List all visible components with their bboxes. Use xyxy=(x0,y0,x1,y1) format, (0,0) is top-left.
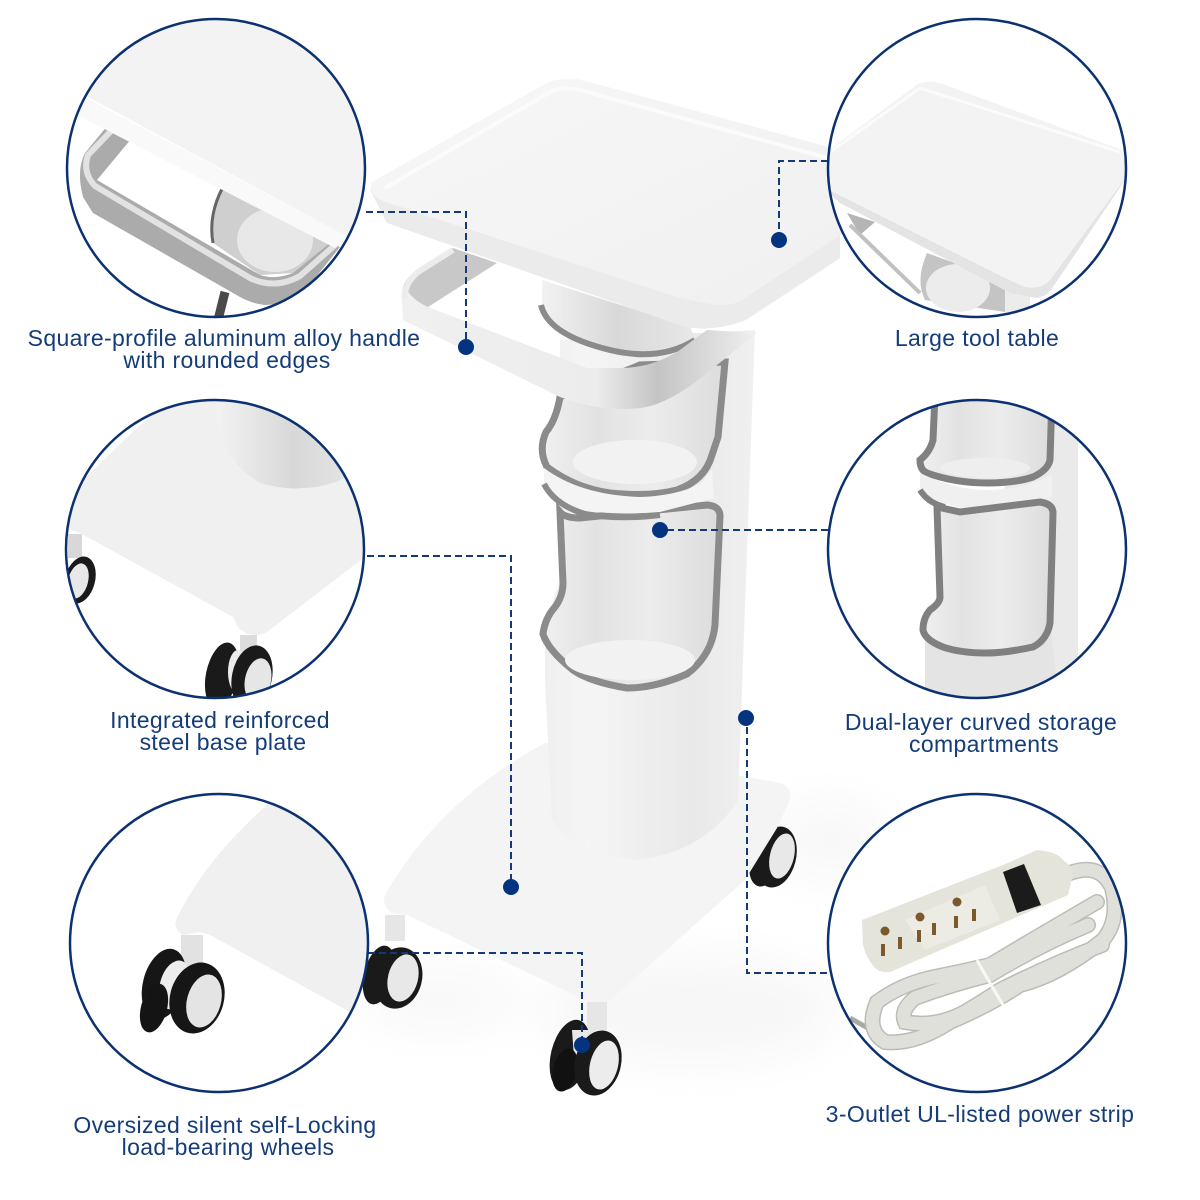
table top xyxy=(825,82,1126,288)
ring xyxy=(67,19,365,317)
left wheel tyre xyxy=(68,556,96,604)
wheel inner band xyxy=(160,960,188,1010)
table rim highlight xyxy=(385,88,835,188)
hub xyxy=(181,971,227,1031)
upper compartment floor xyxy=(573,440,697,484)
storage bowl xyxy=(920,253,1005,312)
upper recess floor xyxy=(949,458,1030,478)
text: compartments xyxy=(909,731,1059,757)
rear left wheel xyxy=(357,915,429,1014)
column xyxy=(545,330,755,860)
circle: power strip xyxy=(828,794,1126,1092)
text: with rounded edges xyxy=(122,347,331,373)
front wheel xyxy=(543,1002,628,1101)
white band between compartments xyxy=(544,468,714,513)
ring xyxy=(828,794,1126,1092)
stem xyxy=(240,635,257,652)
text: load-bearing wheels xyxy=(122,1134,334,1160)
lower compartment xyxy=(543,505,720,688)
lower body shading xyxy=(925,620,1060,710)
ring xyxy=(66,400,364,698)
table front edge xyxy=(104,125,338,248)
table side xyxy=(370,100,840,328)
rear right wheel xyxy=(744,822,803,892)
table top xyxy=(371,79,845,305)
label: handle: Square-profile aluminum alloy handle xyxy=(28,325,420,351)
cord loops xyxy=(872,870,1115,1042)
column xyxy=(247,405,344,488)
front wheel xyxy=(162,956,232,1040)
upper compartment xyxy=(542,362,725,494)
handle highlight xyxy=(86,130,335,284)
bowl centre xyxy=(237,208,313,272)
left wheel hub xyxy=(70,563,89,598)
outlet holes xyxy=(880,898,976,956)
cart product photo xyxy=(357,79,845,1101)
circle: tool table xyxy=(825,19,1126,320)
label: base plate: Integrated reinforced xyxy=(110,707,330,733)
base plate xyxy=(384,743,790,1004)
cable tie xyxy=(977,960,1003,1005)
table side xyxy=(825,180,1125,298)
table rim xyxy=(830,88,1120,152)
lock lever xyxy=(140,984,168,1032)
text: steel base plate xyxy=(140,729,306,755)
ring xyxy=(70,794,368,1092)
gray ring xyxy=(541,305,695,354)
bowl rim xyxy=(212,187,223,243)
column xyxy=(1005,290,1030,313)
outlet panels xyxy=(905,885,1000,950)
marker dots xyxy=(458,232,787,1053)
cord loops outline xyxy=(872,870,1115,1042)
label: storage compartments: Dual-layer curved storage xyxy=(845,709,1117,735)
bowl centre xyxy=(926,264,990,312)
floor shadow xyxy=(360,800,890,1065)
switch xyxy=(1003,864,1041,913)
handle rim highlight xyxy=(405,250,453,298)
label: power strip: 3-Outlet UL-listed power strip xyxy=(826,1101,1134,1127)
handle front bar xyxy=(402,286,757,409)
circle: storage compartments xyxy=(828,395,1126,710)
white band xyxy=(920,473,1004,508)
table top xyxy=(87,20,364,236)
circle: aluminum handle xyxy=(60,10,380,320)
wheels xyxy=(204,642,236,697)
storage bowl xyxy=(212,187,335,275)
handle arm xyxy=(847,213,875,235)
left wheel stem xyxy=(68,534,82,558)
lower recess xyxy=(923,502,1053,653)
handle front bar xyxy=(850,225,920,293)
plate xyxy=(175,805,375,1015)
ring xyxy=(828,400,1126,698)
circle: base plate xyxy=(59,395,370,712)
column xyxy=(1004,424,1078,674)
band lower edge xyxy=(920,490,945,507)
handle back arm xyxy=(402,248,497,307)
plate xyxy=(60,395,370,635)
strip body xyxy=(862,850,1073,972)
back wheel xyxy=(142,948,185,1018)
lower compartment floor xyxy=(565,640,695,680)
lower band edge xyxy=(544,484,660,517)
handle outer xyxy=(80,125,340,305)
upper support cylinder xyxy=(542,280,695,353)
stem xyxy=(181,935,203,969)
label: wheels: Oversized silent self-Locking xyxy=(73,1112,377,1138)
dashed leader lines xyxy=(366,161,828,1045)
ring xyxy=(828,19,1126,317)
upper recess xyxy=(920,395,1052,483)
column below handle xyxy=(218,292,225,320)
label: tool table: Large tool table xyxy=(895,325,1059,351)
circle: wheels xyxy=(70,794,375,1092)
cord tail xyxy=(850,1018,880,1035)
